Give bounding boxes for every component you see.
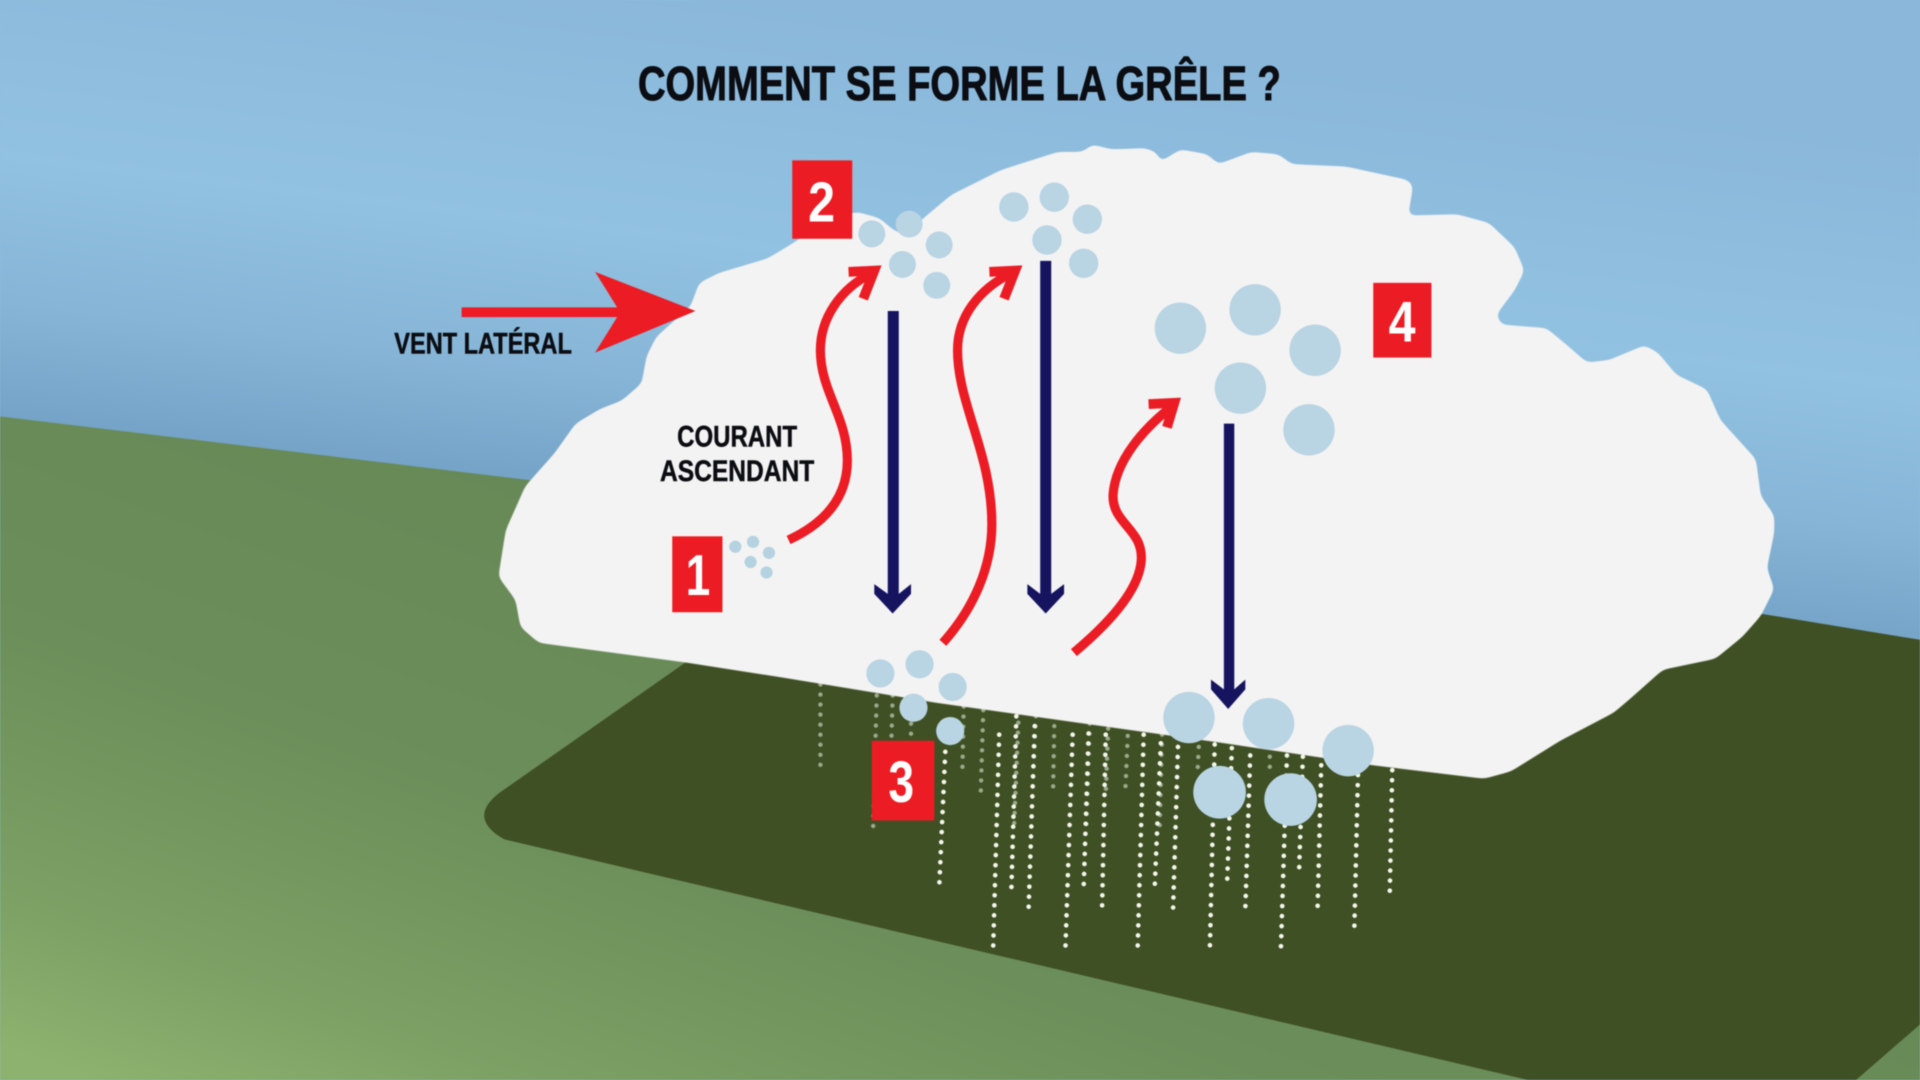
label: updraft: ASCENDANT: [660, 455, 814, 488]
downdraft arrow 3: [1211, 424, 1245, 709]
step badge 2: 2: [808, 171, 835, 234]
hailstones stage 2 right: [999, 182, 1102, 278]
step badge 3: [872, 741, 934, 820]
hailstones stage 4 top: [1155, 284, 1341, 456]
label: updraft: COURANT: [677, 420, 797, 453]
dark shadow on the ground: [485, 615, 1920, 1080]
storm cloud: [498, 144, 1774, 779]
hailstones stage 1: [729, 536, 775, 579]
downdraft arrow 2: [1027, 261, 1064, 613]
downdraft arrow 1: [874, 311, 911, 613]
ground: [0, 416, 1920, 1080]
updraft arrow 2: [943, 271, 1015, 643]
label: lateral wind: VENT LATÉRAL: [394, 326, 572, 360]
step badge 2: [792, 160, 852, 239]
label: updraft: [660, 420, 814, 488]
updraft arrow 1: [789, 271, 874, 540]
step badge 4: 4: [1389, 291, 1416, 355]
hail rain streaks: [939, 716, 1392, 951]
hailstones stage 4 falling: [1163, 692, 1374, 826]
hailstones stage 2 left: [858, 211, 953, 299]
step badge 1: 1: [686, 544, 710, 608]
faded rain behind: [820, 684, 1270, 831]
step badge 4: [1373, 283, 1431, 358]
step badge 1: [672, 536, 722, 612]
hailstones stage 3: [866, 650, 967, 745]
title: COMMENT SE FORME LA GRÊLE ?: [638, 56, 1281, 111]
updraft arrow 3: [1074, 403, 1174, 653]
step badge 3: 3: [888, 750, 914, 815]
wind arrow: [462, 272, 696, 353]
